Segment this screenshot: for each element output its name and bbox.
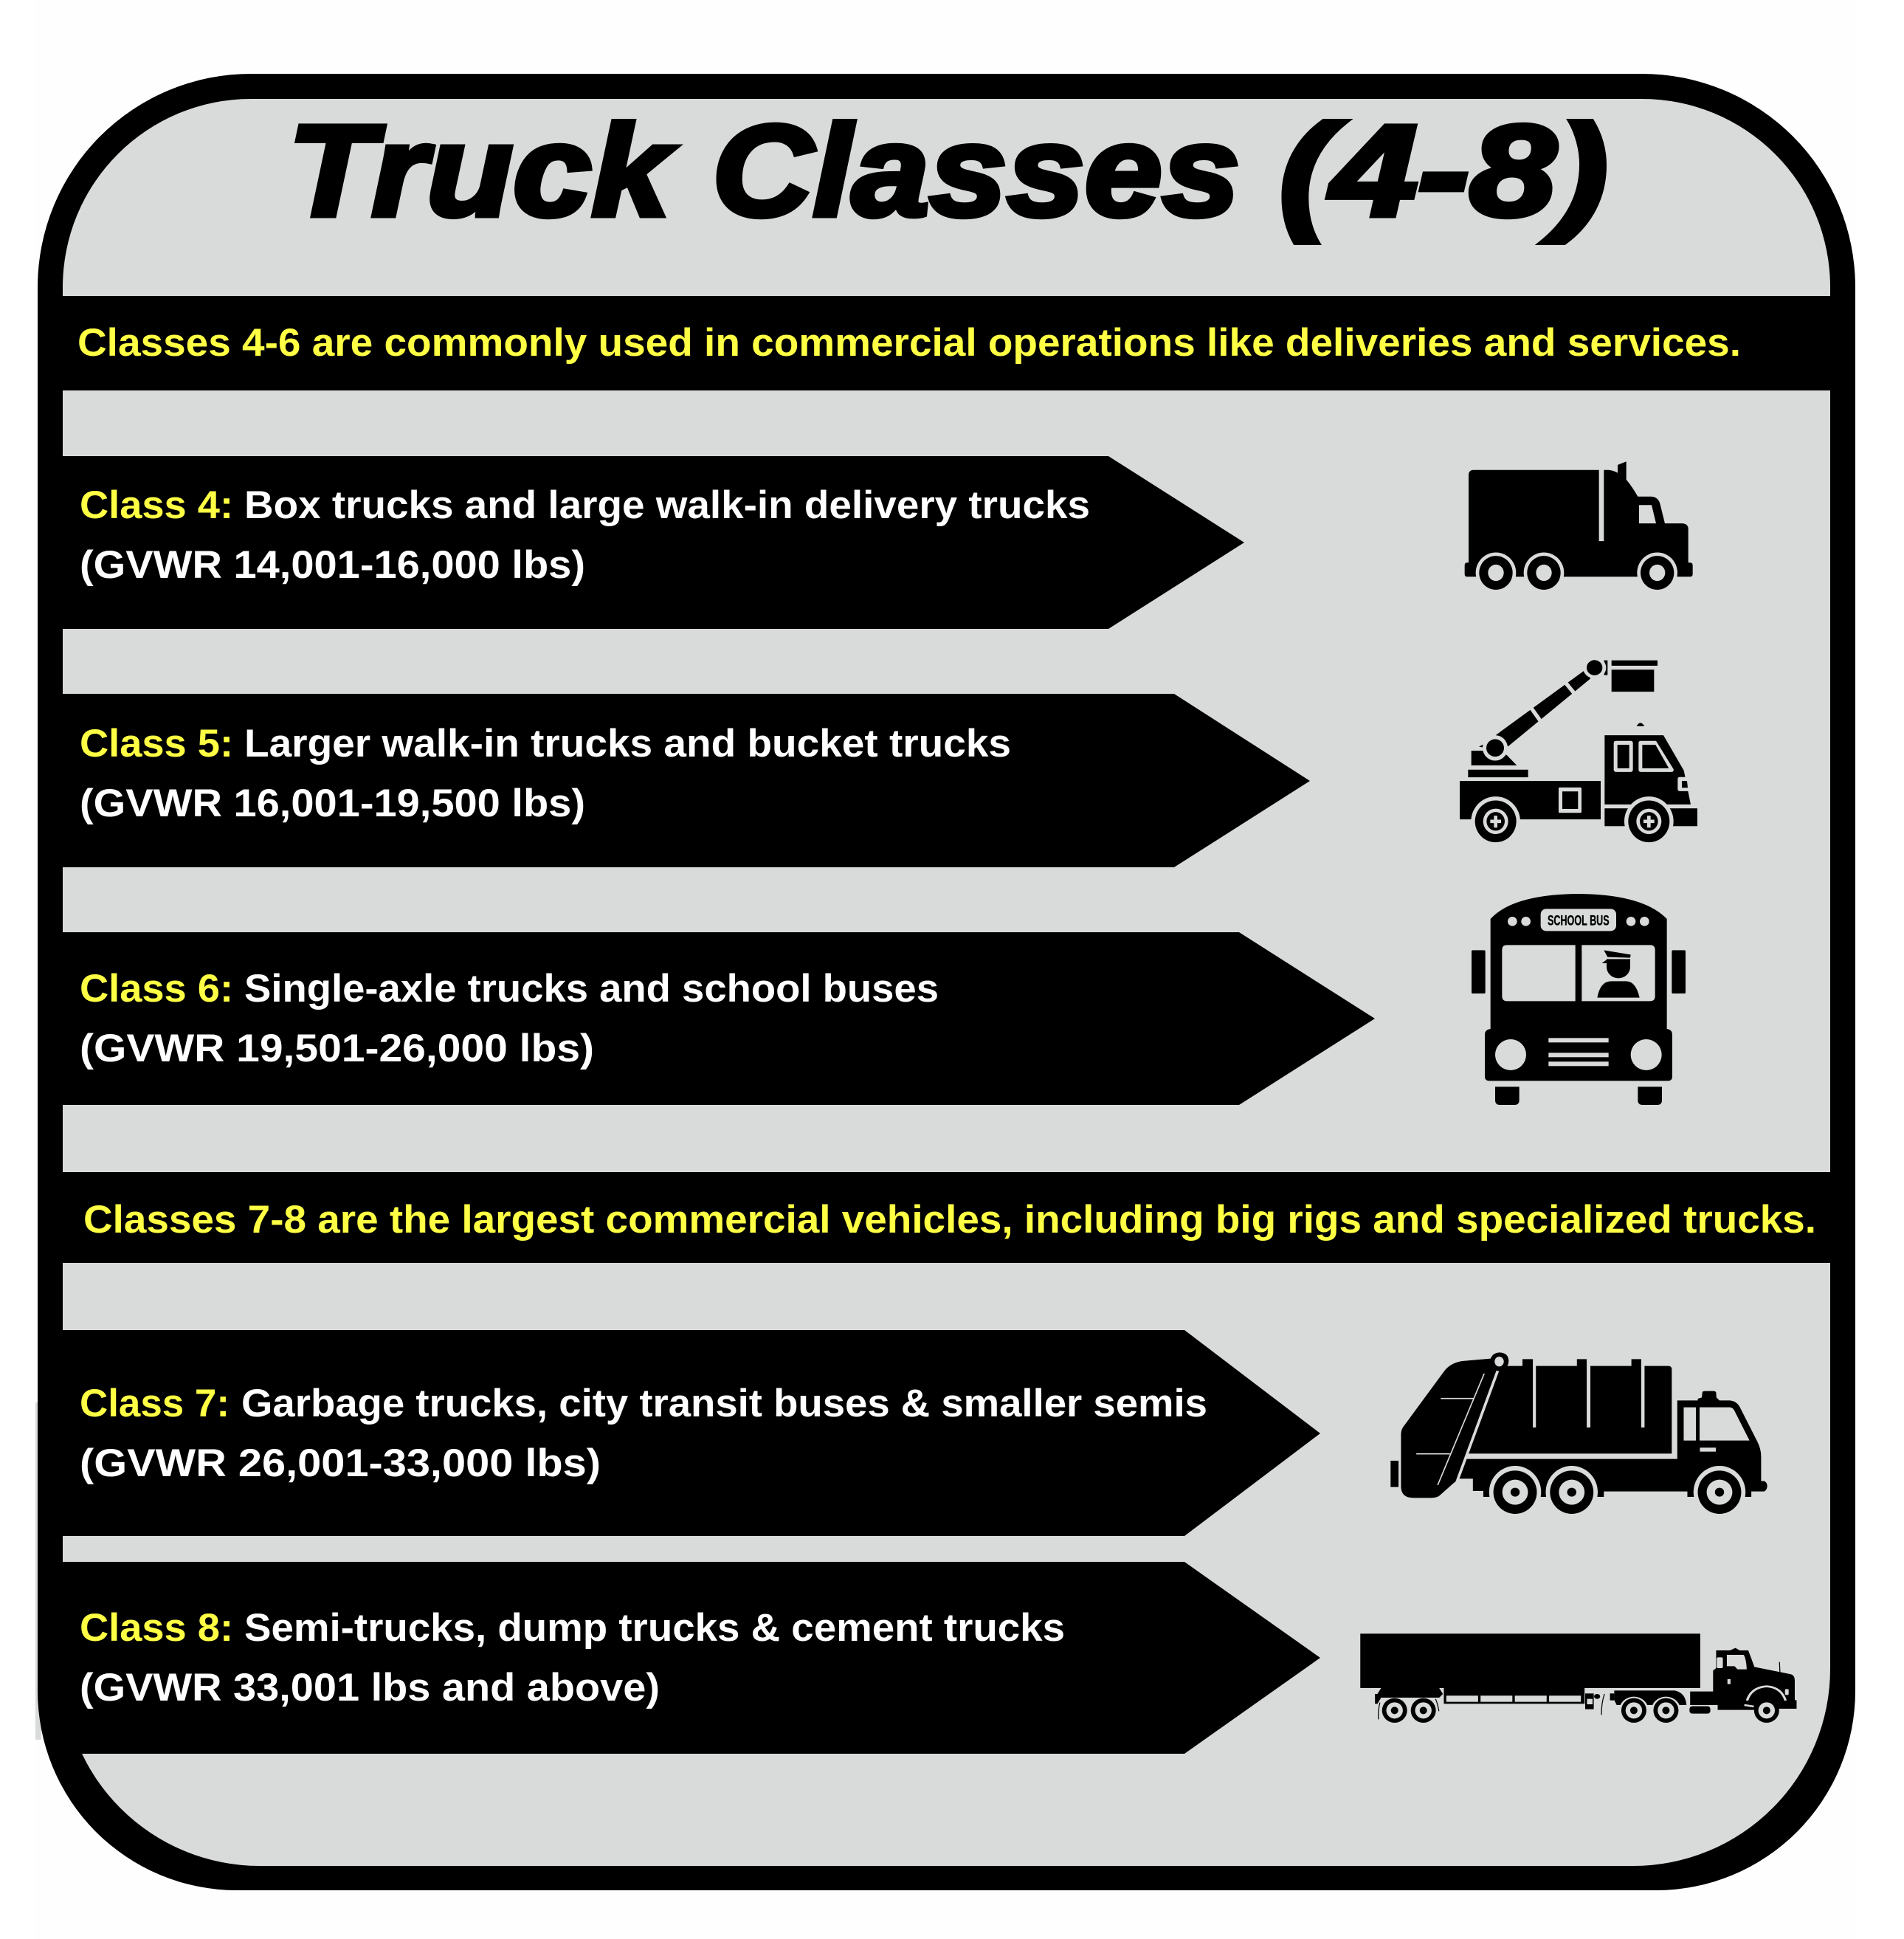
- banner: classes 7-8: Classes 7-8 are the largest commercial vehicles, including big rigs and specialized trucks.: [83, 1198, 1816, 1241]
- arrow: class 6: Single-axle trucks and school buses: [244, 967, 939, 1010]
- title: [288, 99, 1608, 244]
- arrow: class 5: [63, 694, 1310, 867]
- icon: bucket truck: [1460, 657, 1697, 846]
- arrow: class 8: (GVWR 33,001 lbs and above): [80, 1666, 660, 1709]
- title: Truck: [288, 99, 677, 244]
- icon: school bus: SCHOOL BUS: [1548, 912, 1610, 929]
- arrow: class 7: [63, 1330, 1320, 1536]
- banner: classes 7-8: [63, 1172, 1830, 1263]
- arrow: class 7: (GVWR 26,001-33,000 lbs): [80, 1442, 601, 1485]
- arrow: class 5: Class 5:: [80, 722, 233, 765]
- icon: semi truck: [1360, 1633, 1796, 1724]
- arrow: class 8: Semi-trucks, dump trucks & cement trucks: [244, 1606, 1065, 1650]
- arrow: class 6: Class 6:: [80, 967, 233, 1010]
- arrow: class 5: (GVWR 16,001-19,500 lbs): [80, 782, 585, 825]
- banner: classes 4-6: [63, 296, 1830, 390]
- arrow: class 6: (GVWR 19,501-26,000 lbs): [80, 1027, 594, 1070]
- arrow: class 4: Box trucks and large walk-in delivery trucks: [244, 483, 1090, 527]
- icon: box truck: [1465, 461, 1693, 593]
- arrow: class 5: Larger walk-in trucks and bucket trucks: [244, 722, 1011, 765]
- title: (4-8): [1279, 99, 1608, 244]
- arrow: class 4: [63, 456, 1244, 629]
- arrow: class 8: Class 8:: [80, 1606, 233, 1650]
- title: Classes: [712, 99, 1240, 244]
- arrow: class 7: Garbage trucks, city transit buses & smaller semis: [241, 1382, 1207, 1425]
- banner: classes 4-6: Classes 4-6 are commonly used in commercial operations like deliveries and services.: [77, 321, 1741, 365]
- arrow: class 4: (GVWR 14,001-16,000 lbs): [80, 543, 585, 587]
- arrow: class 6: [63, 932, 1375, 1105]
- arrow: class 8: [63, 1562, 1320, 1754]
- icon: garbage truck: [1390, 1352, 1767, 1518]
- arrow: class 7: Class 7:: [80, 1382, 230, 1425]
- icon: school bus: [1472, 894, 1686, 1105]
- arrow: class 4: Class 4:: [80, 483, 233, 527]
